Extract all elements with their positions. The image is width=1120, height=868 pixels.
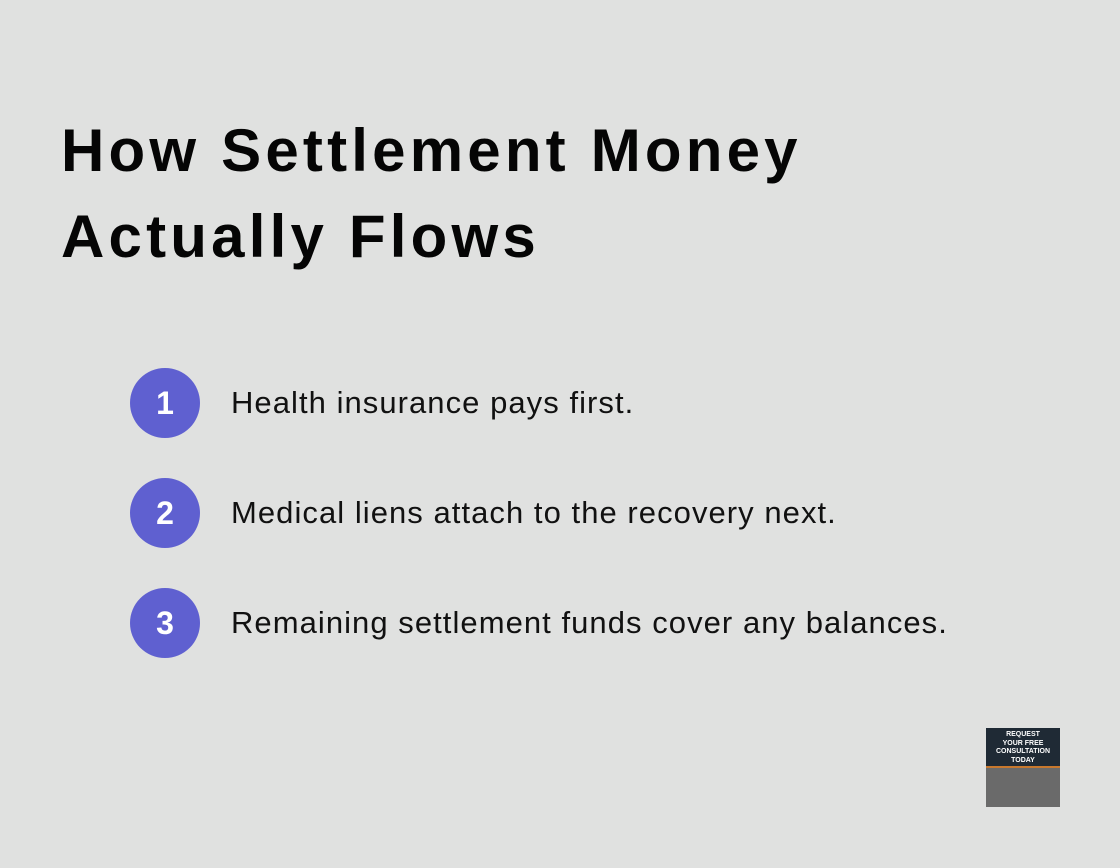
title	[61, 117, 802, 270]
step 2	[130, 478, 837, 548]
title: How Settlement Money	[61, 117, 802, 184]
step 2: Medical liens attach to the recovery next.	[231, 495, 837, 530]
step 3: Remaining settlement funds cover any balances.	[231, 605, 948, 640]
consultation badge: YOUR FREE	[1003, 740, 1043, 746]
consultation badge: REQUEST	[1006, 731, 1040, 738]
title: Actually Flows	[61, 203, 540, 270]
step 1: Health insurance pays first.	[231, 385, 634, 420]
consultation badge	[986, 728, 1060, 807]
consultation badge: TODAY	[1011, 756, 1035, 764]
step 1	[130, 368, 634, 438]
step 1: 1	[156, 385, 174, 421]
consultation badge: CONSULTATION	[996, 748, 1050, 755]
step 3	[130, 588, 948, 658]
step 2: 2	[156, 495, 174, 531]
step 3: 3	[156, 605, 174, 641]
